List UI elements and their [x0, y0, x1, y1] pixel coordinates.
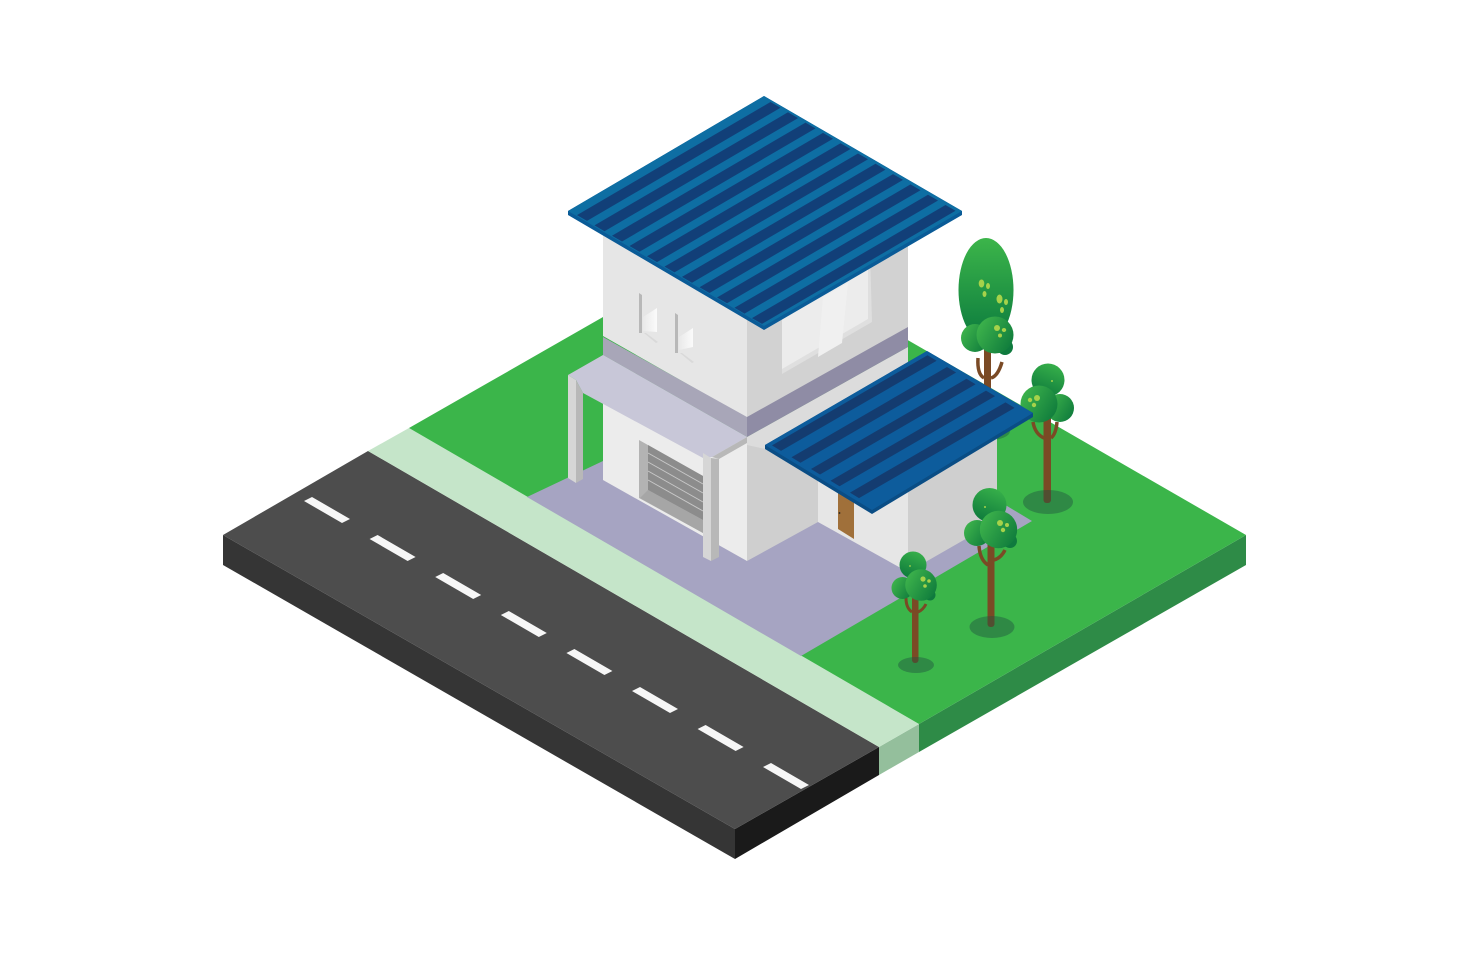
road dashes [304, 497, 809, 789]
upper band right [747, 327, 908, 437]
recessed front wall [818, 400, 908, 572]
house [568, 96, 997, 572]
small window one [639, 293, 658, 343]
driveway [527, 461, 1032, 656]
wedge above porch [747, 347, 908, 450]
tree: tall behind house [958, 238, 1014, 440]
grass lawn [409, 241, 1246, 752]
side wall [908, 400, 997, 572]
sidewalk [368, 428, 919, 775]
lower left wall [603, 355, 747, 561]
lower right wall [747, 347, 908, 561]
front door [838, 480, 854, 539]
tree: left front [892, 552, 937, 673]
upper band left [603, 337, 747, 437]
front pillar and beam [703, 437, 747, 561]
carport slab [568, 355, 747, 458]
road [223, 451, 879, 859]
tree: middle front [964, 488, 1017, 638]
small window two [675, 313, 694, 363]
upper right wall [747, 230, 908, 418]
tree: right side [1020, 364, 1074, 514]
upper left wall [603, 230, 747, 418]
garage door [639, 440, 703, 533]
main roof [568, 96, 962, 330]
large window [782, 252, 872, 374]
porch roof [765, 351, 1033, 514]
left pillar [568, 375, 583, 483]
